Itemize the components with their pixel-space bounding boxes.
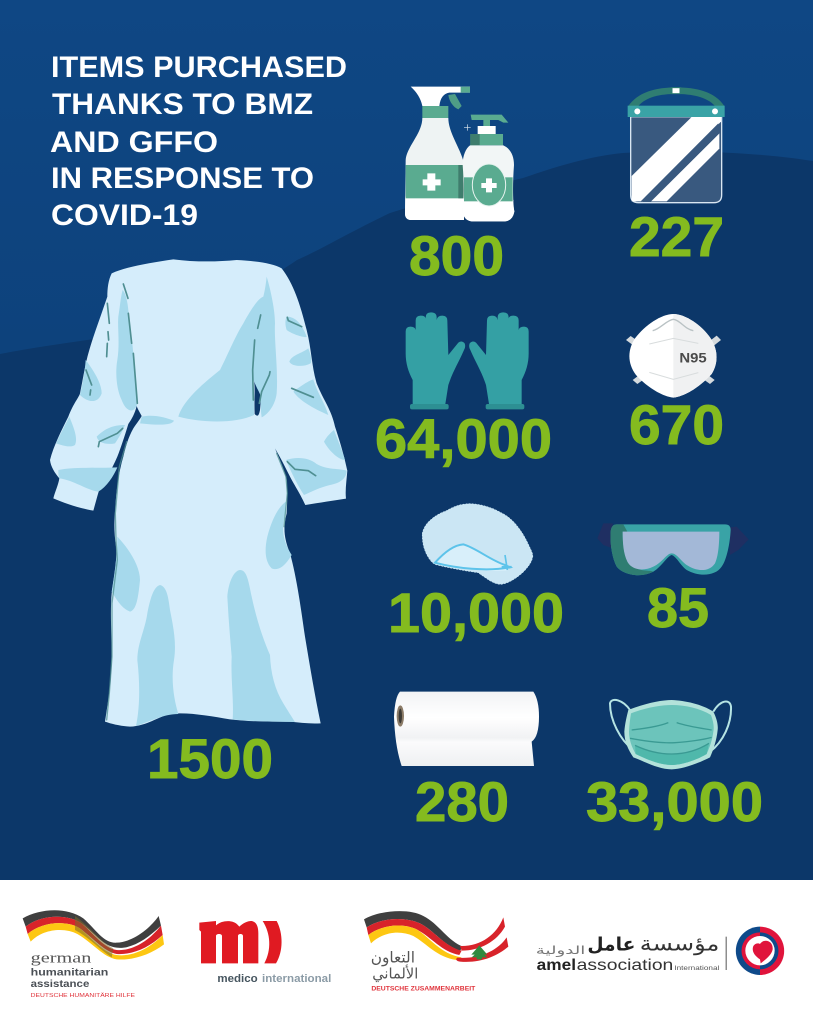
title — [50, 51, 347, 232]
logo: german humanitarian assistance: assistance — [31, 979, 90, 990]
icon: surgical mask — [610, 700, 731, 769]
count: goggles: 85 — [647, 576, 709, 639]
count: N95 masks: 670 — [629, 393, 724, 456]
logo: german humanitarian assistance — [23, 910, 164, 999]
count: surgical masks: 33,000 — [586, 770, 763, 833]
logo: german humanitarian assistance: DEUTSCHE HUMANITÄRE HILFE — [31, 992, 135, 999]
logo: amel association international: amel — [537, 957, 576, 974]
logo: amel association international: الدولية — [536, 944, 585, 957]
gown stitching — [86, 284, 316, 720]
icon: N95 mask: N95 — [679, 349, 707, 365]
count: rolls: 280 — [415, 770, 509, 833]
gown shading — [56, 277, 347, 726]
icon: plastic roll — [394, 692, 539, 766]
footer band — [0, 880, 813, 1024]
title: COVID-19 — [51, 199, 198, 232]
icon: face shield — [628, 87, 725, 203]
count: face shields: 227 — [629, 205, 724, 268]
logo: amel association international: مؤسسة — [640, 933, 719, 956]
icon: goggles — [597, 523, 749, 575]
count: gowns: 1500 — [147, 727, 273, 790]
logo: Deutsche Zusammenarbeit: الألماني — [372, 965, 418, 983]
logo: amel association international: association — [577, 957, 673, 974]
logo: amel association international — [536, 927, 784, 975]
logo: Deutsche Zusammenarbeit: DEUTSCHE ZUSAMMENARBEIT — [371, 987, 476, 993]
logo: amel association international: عامل — [587, 935, 635, 956]
title: AND GFFO — [50, 126, 218, 159]
icon: sanitizer bottles — [405, 87, 514, 221]
logo: german humanitarian assistance: german — [31, 951, 92, 967]
count: hair caps: 10,000 — [388, 581, 564, 644]
icon: N95 mask — [626, 314, 721, 398]
logo: german humanitarian assistance: humanitarian — [31, 967, 108, 978]
logo: medico international: medico — [217, 973, 258, 985]
icon: gloves — [406, 312, 529, 409]
logo: medico international — [199, 921, 331, 985]
count: sanitizer: 800 — [409, 224, 504, 287]
logo: amel association international: International — [674, 965, 720, 972]
icon: surgical gown — [50, 259, 347, 727]
logo: Deutsche Zusammenarbeit: التعاون — [371, 948, 415, 966]
logo: medico international: international — [262, 973, 331, 985]
icon: hair cap — [423, 505, 532, 583]
logo: Deutsche Zusammenarbeit — [364, 911, 508, 993]
title: IN RESPONSE TO — [51, 162, 314, 195]
title: ITEMS PURCHASED — [51, 51, 347, 84]
count: gloves: 64,000 — [375, 407, 552, 470]
title: THANKS TO BMZ — [52, 88, 313, 121]
